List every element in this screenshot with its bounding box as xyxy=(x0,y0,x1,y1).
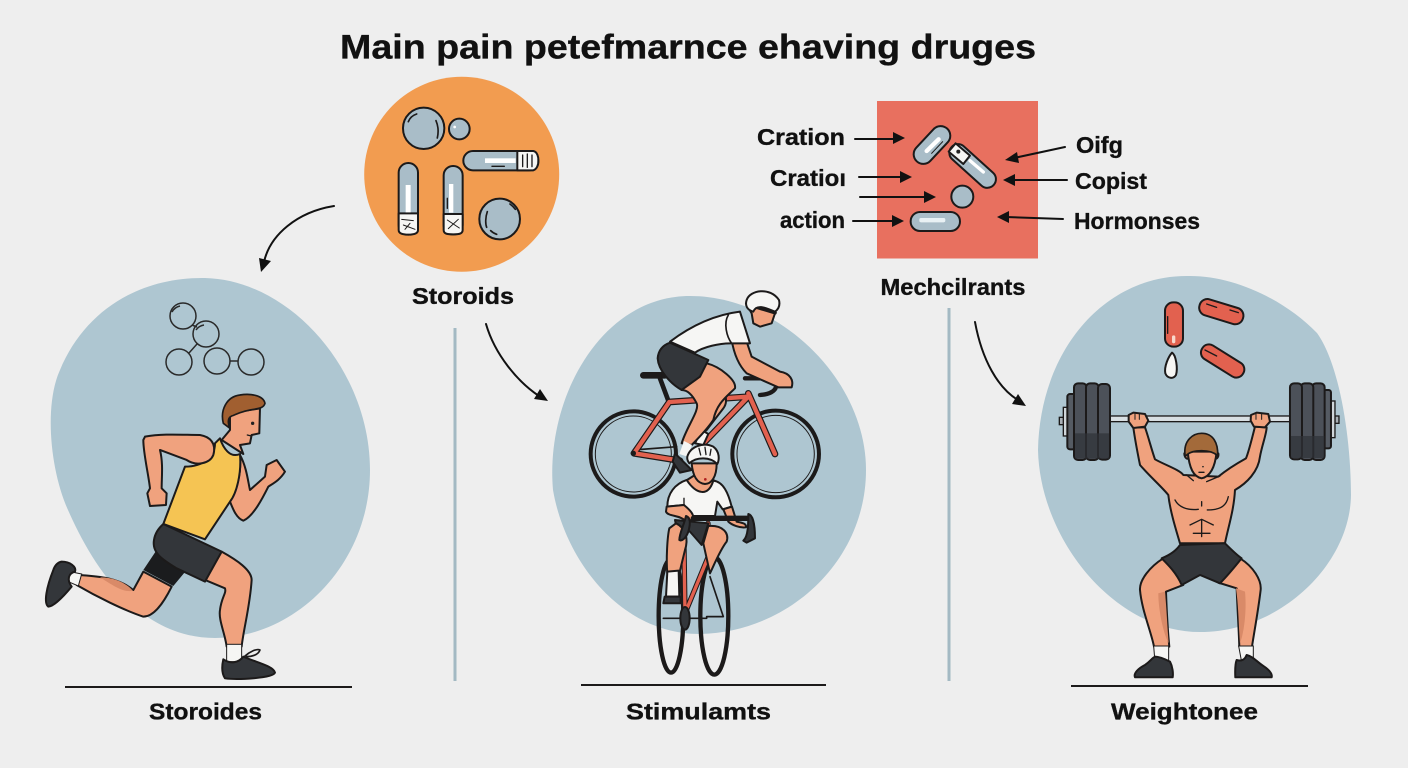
label: Copist: Copist xyxy=(1075,168,1147,194)
arrow xyxy=(859,171,912,183)
background blob xyxy=(1038,276,1351,632)
label: Storoides: Storoides xyxy=(149,698,262,724)
arrow: curved to runner xyxy=(259,206,334,272)
ground line xyxy=(1071,685,1308,687)
background blob xyxy=(51,278,370,638)
icon: barbell xyxy=(1059,383,1339,460)
panel: cyclists xyxy=(552,291,866,724)
label: Storoids: Storoids xyxy=(412,283,514,309)
arrow xyxy=(1003,174,1067,186)
figure: lifter xyxy=(1059,297,1339,677)
label: Cration: Cration xyxy=(757,124,845,150)
figure: runner xyxy=(46,394,285,679)
label: Oifg: Oifg xyxy=(1076,132,1123,158)
icon: molecule chain xyxy=(166,303,264,375)
title: Main pain petefmarnce ehaving druges xyxy=(340,28,1036,66)
label: Weightonee: Weightonee xyxy=(1111,698,1258,724)
ground line xyxy=(65,686,352,688)
red square xyxy=(877,101,1038,258)
figure: upper cyclist xyxy=(591,291,819,497)
label: Mechcilrants: Mechcilrants xyxy=(880,274,1026,300)
background blob xyxy=(552,296,866,634)
arrow xyxy=(1005,147,1065,163)
icon: pills and capsules xyxy=(399,108,538,239)
callouts: left labels with arrows xyxy=(757,124,936,233)
label: Hormonses: Hormonses xyxy=(1074,208,1200,234)
label: action: action xyxy=(780,207,845,233)
callouts: right labels with arrows xyxy=(997,132,1200,234)
panel: mechanisms red square xyxy=(877,101,1038,258)
panel: weightlifter xyxy=(1038,276,1351,724)
orange circle xyxy=(364,77,559,272)
label: Cratioı: Cratioı xyxy=(770,165,846,191)
figure: lower cyclist xyxy=(659,445,755,675)
arrow: curved to cyclist xyxy=(486,324,548,401)
panel: steroids pill circle xyxy=(364,77,559,272)
icon: capsules xyxy=(910,122,999,231)
panel: runner xyxy=(46,278,370,724)
arrow xyxy=(853,215,904,227)
arrow: curved to lifter xyxy=(975,322,1026,406)
lifter body xyxy=(1129,413,1272,677)
arrow xyxy=(997,211,1063,223)
arrow xyxy=(855,132,905,144)
arrow xyxy=(860,191,936,203)
label: Stimulamts: Stimulamts xyxy=(626,698,771,724)
ground line xyxy=(581,684,826,686)
icon: red pills xyxy=(1165,297,1247,380)
